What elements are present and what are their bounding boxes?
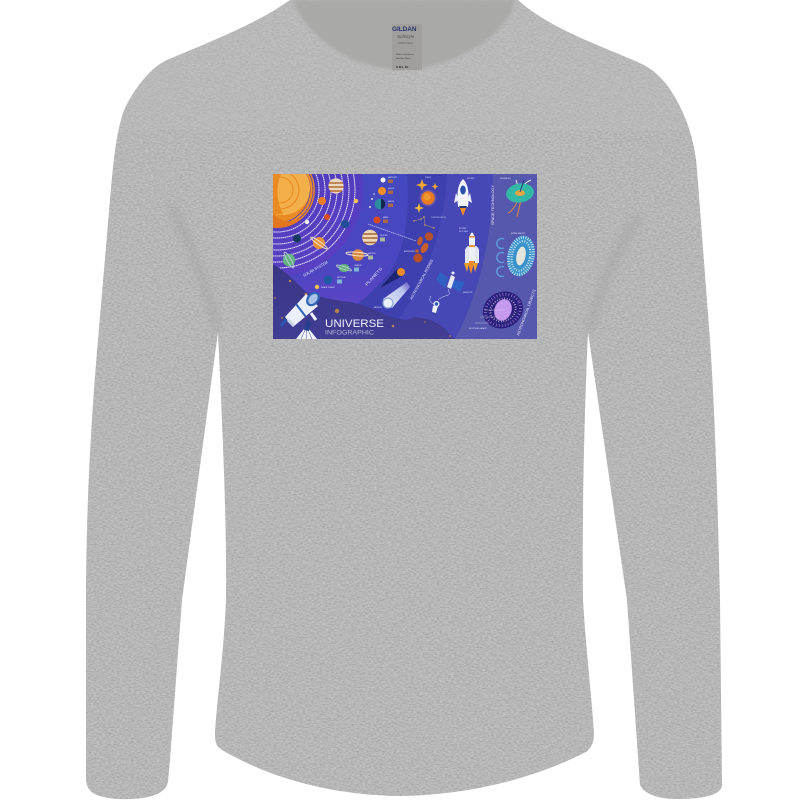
title: UNIVERSE: [325, 318, 384, 330]
asteroids: [404, 232, 433, 262]
title: INFOGRAPHIC: [325, 330, 375, 336]
satellite: SATELLITE: [463, 291, 473, 294]
rocket: ROCKET: [467, 178, 475, 180]
planet captions: JUPITER: [380, 235, 388, 237]
constellation: [413, 176, 447, 229]
neck label: GILDAN: [392, 26, 417, 33]
neck label: Machine Wash: [396, 58, 411, 60]
multistage rocket: MULTI STAGE: [459, 230, 468, 233]
space technology band: [399, 174, 493, 339]
comet: [380, 268, 405, 288]
telescope: [281, 289, 323, 339]
rocket: [454, 178, 475, 216]
title: [326, 320, 384, 334]
planets column: [315, 178, 386, 289]
stars and small sun: [414, 179, 438, 213]
constellation: CONSTELLATION: [431, 216, 447, 219]
spiral galaxy: SPIRAL GALAXY: [511, 232, 526, 235]
wormhole disc: WORMHOLE: [500, 178, 512, 180]
planet captions: DWARF PLANET: [321, 286, 336, 289]
neck label: 100% Cotton: [398, 41, 414, 45]
satellite: [436, 272, 473, 294]
planets heading: PLANETS: [364, 266, 383, 287]
multistage rocket: [459, 228, 479, 274]
planet captions: [321, 177, 398, 289]
printed poster: universe infographic: [273, 174, 537, 339]
neck label: [392, 24, 422, 70]
neck label: Softstyle: [397, 34, 415, 39]
asteroids: ASTEROIDS: [404, 250, 415, 253]
solar system planets: [283, 178, 358, 269]
foreground hill: [273, 264, 455, 339]
planets band: [288, 174, 408, 304]
dark galaxy: ELLIPTICAL GALAXY: [469, 327, 487, 330]
sun: [273, 174, 315, 228]
planet captions: MARS: [383, 216, 389, 219]
shirt body and sleeves: [86, 0, 722, 800]
meteor: METEOR: [374, 307, 382, 309]
small galaxy rings: [497, 239, 504, 276]
constellation: STARS: [425, 176, 432, 179]
solar system heading: SOLAR SYSTEM: [302, 260, 329, 278]
dashed divider: [368, 224, 416, 241]
astronomical bodies band: [408, 216, 442, 303]
planet captions: MERCURY: [388, 177, 398, 179]
astronomical bodies heading: ASTRONOMICAL BODIES: [409, 258, 434, 300]
multistage rocket: ROCKET: [459, 228, 467, 230]
planet captions: EARTH: [388, 200, 395, 203]
planet captions: NEPTUNE: [337, 277, 346, 279]
meteor: [374, 282, 410, 309]
astronaut: [430, 289, 449, 313]
neck label: S M L XL: [396, 65, 409, 69]
planet captions: SATURN: [368, 252, 376, 255]
hill stars: [274, 280, 451, 337]
long sleeve shirt product image: [86, 0, 722, 800]
dashed orbit rings: [273, 174, 356, 268]
poster background outer band: [455, 174, 537, 339]
shirt neck opening: [293, 0, 515, 70]
dark galaxy: [469, 292, 524, 329]
astronomical objects heading: ASTRONOMICAL OBJECTS: [516, 288, 537, 336]
neck label: Made in Honduras: [396, 53, 415, 56]
space technology heading: SPACE TECHNOLOGY: [490, 185, 495, 225]
planet captions: VENUS: [388, 188, 395, 190]
spiral galaxy: [507, 232, 535, 276]
wormhole disc: [500, 178, 535, 217]
planet captions: URANUS: [354, 264, 362, 267]
solar system band: [273, 174, 363, 275]
